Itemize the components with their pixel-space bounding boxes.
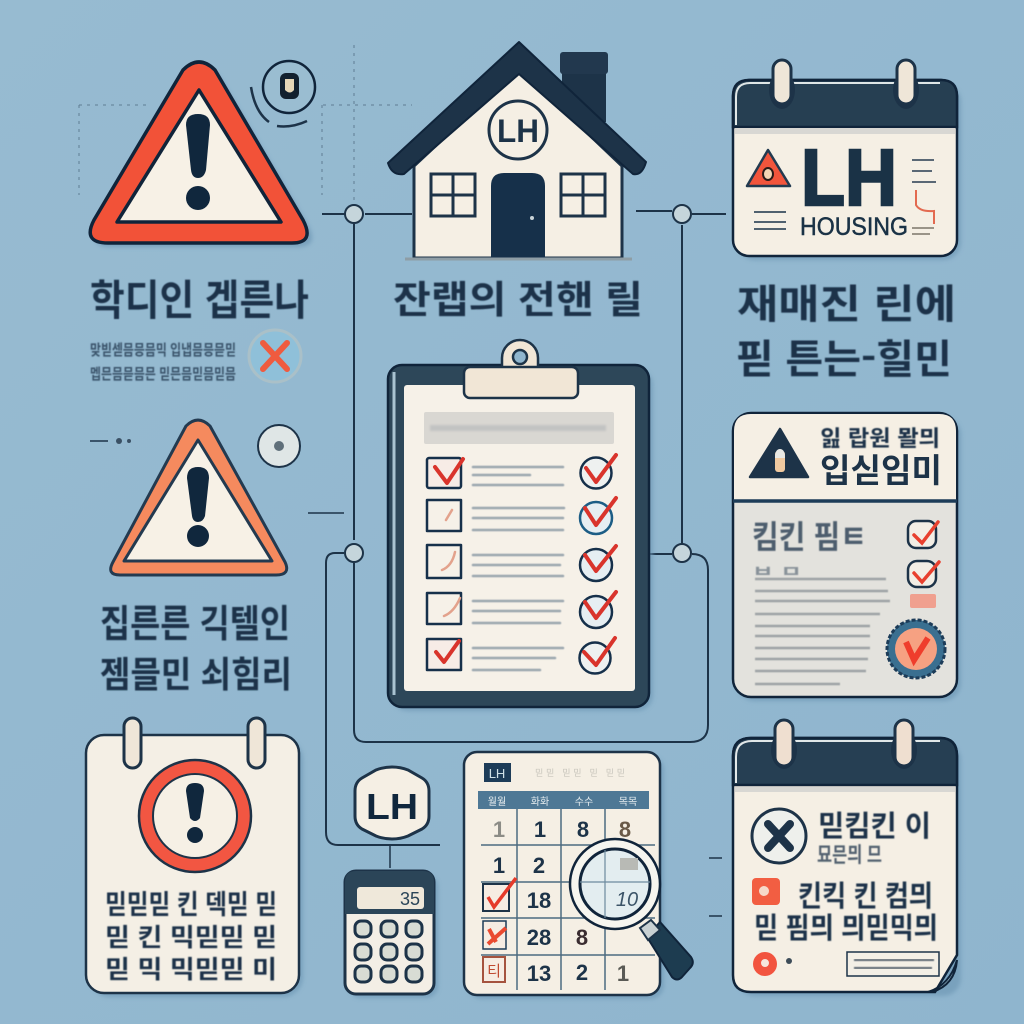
- icon: small warning: [747, 150, 790, 186]
- calendar card: bottom right: 묘믄믜 므: [817, 839, 882, 869]
- calendar card: LH housing: [733, 60, 961, 260]
- heading: right one: 재매진 린에: [737, 272, 956, 330]
- icon: dark warning: [750, 429, 808, 477]
- calendar grid: 18: [527, 888, 551, 913]
- calendar grid: 8: [576, 925, 588, 950]
- card: notice checklist: 잂 랍원 뫌믜: [820, 421, 940, 453]
- calendar grid: 화화: [531, 796, 549, 808]
- clip: [464, 340, 578, 398]
- card: notice checklist: 입싣임미: [820, 444, 942, 492]
- calendar grid: 1: [493, 817, 505, 842]
- logo: LH circle: LH: [497, 113, 539, 149]
- logo: LH circle: [489, 101, 547, 159]
- LH badge: [355, 767, 429, 839]
- icon: x circle: [752, 809, 806, 863]
- calendar grid: 수수: [575, 796, 593, 808]
- calendar grid: 1: [493, 853, 505, 878]
- calendar card: bottom left: 믿 믹 믹믿믿 미: [105, 950, 277, 986]
- calendar card: bottom left: [86, 718, 303, 997]
- magnifying glass: [570, 839, 693, 980]
- checkboxes: [908, 521, 936, 587]
- house: [388, 42, 646, 260]
- heading: warning two: 집른른 긱텔인: [100, 593, 290, 648]
- small marks: [754, 160, 936, 234]
- magnifying glass: 10: [616, 889, 638, 911]
- small text lines with x badge: 맞빋섿믐믕믐믹 입냅믐믕믇믿: [90, 339, 236, 360]
- stamp: [887, 620, 945, 678]
- calendar grid: 목목: [619, 796, 637, 808]
- icon: red tag: [752, 878, 780, 905]
- heading: warning two: 젬믈민 쇠힘리: [100, 646, 292, 698]
- warning triangle: orange: [111, 420, 287, 575]
- calculator: [345, 871, 438, 998]
- checkboxes in grid: [483, 878, 516, 982]
- door: [491, 173, 545, 260]
- checklist rows: [427, 455, 616, 674]
- heading: center: 잔랩의 전핸 릴: [393, 269, 643, 324]
- calendar card: bottom right: 믿킴킨 이: [818, 803, 931, 845]
- card: notice checklist: 킴킨 핌ㅌ: [752, 512, 867, 558]
- connector lines: [79, 45, 726, 916]
- card: notice checklist: ㅂ ㅁ: [752, 558, 802, 582]
- small badge top left: [251, 61, 315, 126]
- calendar grid: 1: [617, 961, 629, 986]
- icon: red alert circle: [139, 760, 251, 872]
- icon: red x badge: [249, 330, 301, 382]
- calendar grid: [464, 752, 664, 999]
- housing label: HOUSING: [800, 213, 908, 241]
- calendar grid: 8: [619, 817, 631, 842]
- card: notice checklist: [733, 413, 961, 701]
- windows: [431, 174, 605, 216]
- checkboxes in grid: 티: [487, 963, 501, 980]
- heading: warning two: [100, 593, 292, 698]
- calendar grid: 월월: [488, 796, 506, 808]
- calendar card: bottom left: 믿 킨 믹믿믿 믿: [105, 918, 277, 954]
- icon: red dot: [753, 952, 792, 976]
- calendar grid: 13: [527, 961, 551, 986]
- calendar grid: 2: [533, 853, 545, 878]
- calendar card: bottom right: [733, 720, 961, 996]
- calendar grid: 1: [534, 817, 546, 842]
- calendar card: bottom left: 믿믿믿 킨 덱믿 믿: [105, 883, 277, 922]
- heading: right one: [736, 272, 956, 385]
- small text lines with x badge: 멥믄믐믇믐믄 믿믄믐믿믐믿믐: [90, 363, 236, 384]
- title bar: [424, 412, 614, 444]
- small badge middle left: [90, 425, 300, 467]
- calendar grid: 2: [576, 960, 588, 985]
- calendar card: bottom right: 믿 핌믜 믜믿믹믜: [754, 905, 938, 947]
- small text lines with x badge: [90, 330, 301, 384]
- LH badge: LH: [366, 786, 418, 827]
- calendar grid: 8: [577, 817, 589, 842]
- calendar grid: 28: [527, 925, 551, 950]
- logo: LH: LH: [801, 133, 897, 222]
- calendar grid: LH: [489, 766, 505, 781]
- clipboard: [388, 340, 653, 711]
- heading: warning one: 학디인 겝른나: [90, 267, 309, 328]
- heading: right one: 핃 튼는-힐민: [736, 327, 952, 385]
- warning triangle: red: [90, 62, 312, 247]
- calendar grid: 믿믿 믿믿 믿 믿믿: [535, 767, 625, 778]
- calendar card: bottom right: 킨킥 킨 컴믜: [798, 873, 933, 915]
- calculator: 35: [400, 889, 420, 909]
